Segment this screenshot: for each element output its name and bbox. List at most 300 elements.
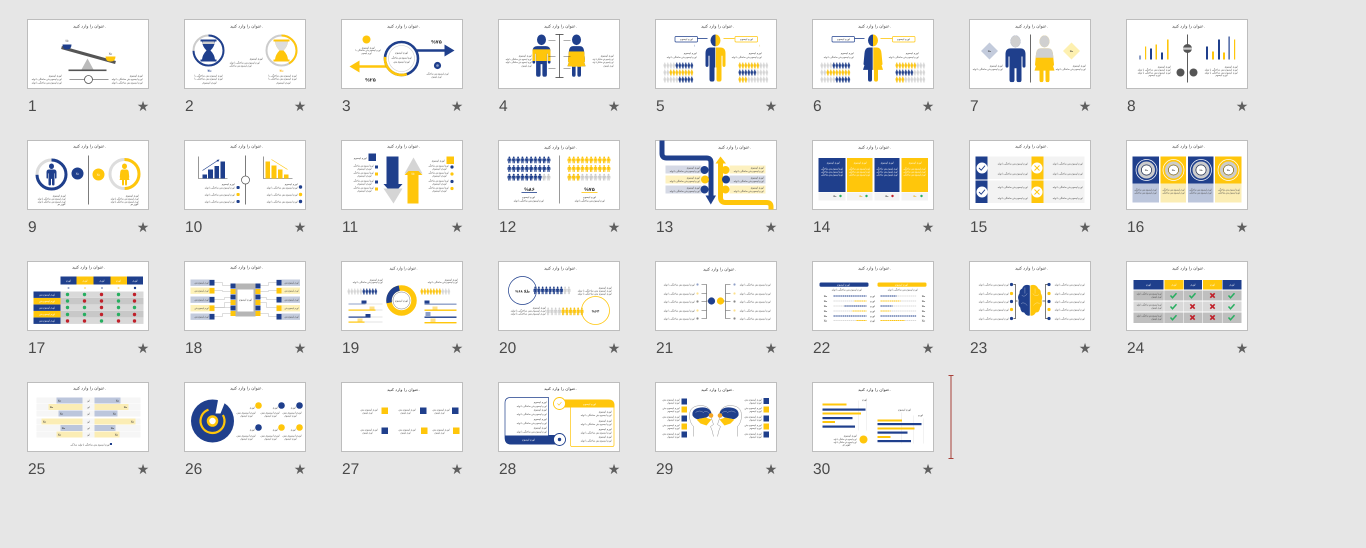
center line and markers [1176,34,1198,82]
text blocks: لورم ایپسوم [400,412,411,414]
slide tile 26: target donut: ★ [294,461,306,477]
table header: لورم [66,280,71,282]
left rows [664,282,699,320]
right list: لورم ایپسوم متن ساختگی [428,164,449,168]
right chart gridlines [902,412,924,444]
table rows [1134,290,1242,323]
icons top row: لورم ایپسوم [284,414,297,418]
target graphic [191,398,234,442]
row labels: لورم ایپسوم متن [39,300,55,303]
sub headings: لورم ایپسوم متن ساختگی با تولید [832,288,862,292]
slide tile 6: split woman with pictograms [812,20,934,115]
left squares and text: لورم ایپسوم [668,427,680,430]
row labels [34,292,60,324]
blue arrow [414,44,454,56]
right head [718,406,742,436]
man figure [532,34,550,77]
text blocks: لورم ایپسوم متن [432,408,450,412]
blue panel: لورم ایپسوم [534,418,547,421]
blue icon and text [426,62,449,78]
table header: لورم [133,280,138,282]
left rows: لورم ایپسوم متن ساختگی با تولید [978,316,1009,320]
blue panel: لورم ایپسوم [534,426,547,430]
left text [506,54,532,68]
right rows: لورم ایپسوم متن ساختگی با تولید [740,292,771,296]
slide tile 23: brain: عنوان را وارد کنید. [1015,266,1048,270]
right pictogram grid [568,156,610,181]
right value and text: لورم ایپسوم متن ساختگی با [268,76,297,80]
slide tile 1: seesaw: طلا [109,52,112,56]
left icon: لورم ایپسوم [354,157,367,160]
right text [1204,66,1238,77]
icons bottom row: لورم ایپسوم [240,438,253,440]
right labels: لورم ایپسوم متن [284,282,299,284]
slide tile 8: bars with center line: 8 [1127,98,1136,115]
left list: لورم ایپسوم متن ساختگی با تولید [204,192,235,196]
slide tile 12: people pictogram percentages: ★ [608,219,620,235]
central chip: لورم ایپسوم [239,298,252,302]
chip pins [230,284,260,316]
left chart gridlines [858,400,866,430]
slide tile 26: target donut: 26 [185,461,202,478]
gauge card 1: لورم ایپسوم متن ساختگی [1134,190,1157,194]
slide tile 20: rings with pictogram rows: ★ [608,340,620,356]
sub headings [832,288,918,292]
right text: لورم ایپسوم متن ساختگی با تولید [110,200,139,204]
center text: لورم ایپسوم [250,58,263,60]
slide tile 7: man, woman, diamonds: 7 [970,98,979,115]
slide tile 28: two framed panels: 28 [499,461,516,478]
right list: لورم ایپسوم [432,190,447,192]
right squares and text: لورم ایپسوم متن [744,432,762,436]
icons top row: لورم ایپسوم متن [260,412,280,414]
left pill: لورم ایپسوم [680,38,693,41]
column yellow 2: لورم ایپسوم متن ساختگی [849,170,870,174]
slide tile 16: four gauge cards: 16 [1127,219,1144,236]
left text: لورم ایپسوم [49,74,62,78]
man figure [1006,36,1026,82]
right pill: لورم ایپسوم [740,38,753,41]
icons bottom row: لورم ایپسوم [284,438,297,440]
right chart labels: لورم ایپسوم [898,408,911,412]
left text: لورم ایپسوم متن ساختگی با تولید [506,57,532,61]
right text: لورم [130,203,139,206]
slide tile 1: seesaw [28,20,149,115]
row labels: طلا [922,310,925,313]
right icon: لورم ایپسوم [432,160,445,162]
row text [1136,292,1162,320]
right text: لورم ایپسوم متن ساختگی با تولید [578,292,612,296]
right rows: لورم ایپسوم متن ساختگی با تولید [1054,300,1085,304]
yellow icon and text: لورم ایپسوم متن ساختگی با [355,48,381,52]
left text: لورم ایپسوم متن ساختگی با تولید [666,55,697,59]
right rows: لورم ایپسوم متن ساختگی با تولید [740,282,771,286]
blue icon and text: لورم ایپسوم متن ساختگی [426,72,449,76]
row stripes [60,292,144,324]
right bars: طلا [113,412,116,416]
slide tile 24: check table [1126,262,1248,357]
slide tile 6: split woman with pictograms: 6 [813,98,822,115]
rising chart [198,156,228,178]
right text: لورم ایپسوم [130,74,143,78]
column blue 1: لورم ایپسوم متن ساختگی [821,166,843,170]
left header text: لورم ایپسوم [370,278,383,282]
column blue 1: طلا [833,195,837,198]
slide tile 4: man and woman with scale: ★ [608,98,620,114]
left text: لورم ایپسوم متن ساختگی با تولید [32,77,62,81]
right text: لورم ایپسوم [604,64,614,68]
slide tile 20: rings with pictogram rows: 20 [499,340,517,357]
donut: لورم ایپسوم [395,300,408,302]
right text: لورم ایپسوم [749,52,762,55]
left bars: طلا [62,427,65,430]
slide tile 25: butterfly bars: عنوان را وارد کنید. [73,386,106,390]
yellow up arrow: طلا [411,172,415,176]
yellow pipe arrow [716,156,771,210]
slide tile 26: target donut: عنوان را وارد کنید. [230,386,263,390]
left value and text: طلا [207,70,212,72]
left rows [978,282,1013,320]
slide tile 29: two heads with brains: 29 [656,461,673,478]
row text: لورم ایپسوم [1152,306,1162,310]
blue ring: %۶۸ طلا [515,290,530,294]
slide tile 16: four gauge cards: ★ [1236,219,1248,235]
row labels: طلا [922,305,925,308]
right bars: طلا [124,406,127,409]
left text: لورم ایپسوم [1158,66,1171,68]
row labels: طلا [922,315,925,318]
left list: لورم ایپسوم متن ساختگی با تولید [204,200,235,204]
column yellow 4: لورم ایپسوم متن ساختگی [904,166,926,170]
falling chart [264,156,292,178]
left text: لورم ایپسوم [522,64,532,68]
left bands: لورم ایپسوم متن ساختگی با تولید [670,169,700,173]
left text [972,64,1003,71]
left text: لورم ایپسوم متن ساختگی با تولید [510,312,546,316]
row labels: لورم [870,305,875,308]
status dots [66,293,136,323]
icons top row: لورم ایپسوم متن [282,412,302,414]
left bands: لورم ایپسوم متن ساختگی با تولید [670,179,700,183]
left pictograms [664,62,693,82]
blue panel: لورم ایپسوم متن ساختگی با تولید [516,404,547,408]
left labels: لورم ایپسوم متن [194,290,209,292]
left chart bars [822,404,866,428]
insertion cursor [948,376,954,458]
right squares and text: لورم ایپسوم متن [744,416,762,418]
blue icon and text: لورم ایپسوم [432,76,442,78]
right bar rows [880,296,916,320]
left rows: لورم ایپسوم متن ساختگی با تولید [978,308,1009,312]
left text [510,306,546,316]
gauge card 3: لورم ایپسوم متن ساختگی [1190,190,1212,194]
footer text: لورم ایپسوم متن ساختگی با تولید سادگی [70,442,110,446]
slide tile 5: split man with pictograms: 5 [656,98,665,115]
right bands: لورم ایپسوم متن ساختگی با تولید [734,189,764,193]
left rows: لورم ایپسوم متن ساختگی با تولید [664,316,695,320]
icons top row: لورم [250,406,255,410]
blue pictograms [534,286,570,294]
brain veins [1021,288,1040,306]
left labels: لورم ایپسوم متن [194,282,209,284]
row labels: لورم [870,315,875,318]
left pill: لورم ایپسوم [837,38,850,41]
right list: لورم ایپسوم [432,168,447,170]
right person [120,164,130,186]
left text: لورم ایپسوم متن ساختگی با تولید [824,55,854,59]
brain left hemisphere [1018,285,1030,316]
left bars [1140,40,1169,60]
right rows: لورم ایپسوم متن ساختگی با تولید [1054,308,1085,312]
left text [514,196,544,202]
left header text [352,278,383,284]
slide tile 18: chip diagram [184,262,306,357]
row text: لورم ایپسوم [1152,318,1162,320]
left text: لورم ایپسوم [990,64,1003,68]
yellow pill: لورم ایپسوم [895,284,908,286]
slide tile 20: rings with pictogram rows: عنوان را وارد کنید. [544,266,577,270]
blue pipe arrow [662,140,716,204]
slide tile 19: donut with bars: ★ [451,340,463,356]
right bands: لورم ایپسوم متن ساختگی با تولید [734,179,764,183]
center labels: لو [86,406,90,409]
right bands: لورم ایپسوم [751,176,764,180]
column blue 3: طلا [885,195,889,198]
left bar rows [834,296,866,320]
yellow panel: لورم ایپسوم [583,403,596,406]
table header: لورم [1230,284,1235,286]
row labels: طلا [824,315,827,318]
left header text: لورم ایپسوم متن ساختگی با تولید [352,280,383,284]
column yellow 4 [902,158,928,200]
text block: لورم ایپسوم متن ساختگی با تولید [834,440,857,444]
left pictograms [348,288,377,294]
left list: لورم ایپسوم متن ساختگی [354,164,374,168]
right bars: طلا [116,400,119,402]
right text: لورم ایپسوم [1216,74,1228,77]
slide tile 11: up and down arrows [342,140,463,236]
slide tile 5: split man with pictograms: ★ [765,98,777,114]
slide tile 7: man, woman, diamonds [970,20,1091,115]
slide tile 1: seesaw: طلا [65,40,69,42]
slide tile 8: bars with center line: ★ [1236,98,1248,114]
right text: لورم ایپسوم [1225,66,1238,68]
slide tile 17: dot matrix table [28,262,149,357]
right text rows: لورم ایپسوم متن ساختگی با تولید [1052,185,1083,189]
column yellow 4: طلا [913,195,917,198]
left bars: طلا [60,412,63,416]
slide tile 5: split man with pictograms: عنوان را وارد کنید. [701,24,734,28]
slide tile 22: dashed timeline table: ★ [922,340,934,356]
right labels: لورم ایپسوم متن [284,316,299,318]
gauge card 2: طلا [1172,169,1175,172]
slide tile 27: six icon items: ★ [451,461,463,477]
slide tile 15: check and cross columns: 15 [970,219,987,236]
slide tile 25: butterfly bars: 25 [28,461,45,478]
right list: لورم ایپسوم متن ساختگی [428,178,449,182]
split woman [863,34,883,82]
left text: لورم ایپسوم [533,306,546,310]
slide tile 29: two heads with brains: ★ [765,461,777,477]
slide tile 17: dot matrix table: ★ [137,340,149,356]
right text: لورم ایپسوم متن ساختگی با تولید [112,80,143,84]
row labels: طلا [922,295,925,298]
slide tile 4: man and woman with scale: عنوان را وارد کنید. [544,24,577,28]
left rows: لورم ایپسوم متن ساختگی با تولید [978,292,1009,296]
slide tile 24: check table: 24 [1127,340,1145,357]
icon squares [382,408,460,434]
left text: لورم ایپسوم متن ساختگی با تولید [514,198,544,202]
left squares and text: لورم ایپسوم [668,418,680,422]
right bars: طلا [111,427,114,430]
right rows: لورم ایپسوم متن ساختگی با تولید [1054,282,1085,286]
icons top row [236,402,303,418]
right bands: لورم ایپسوم [751,166,764,170]
column blue 1: لورم ایپسوم [827,162,840,164]
right text: لورم ایپسوم [906,52,919,55]
left bars: طلا [58,400,61,402]
height bracket [548,34,570,78]
table header: لورم [1191,284,1196,286]
center ring: لورم ایپسوم متن [394,60,410,64]
right bracket [724,284,730,318]
split man [706,34,726,82]
slide tile 2: hourglasses: عنوان را وارد کنید. [230,24,263,28]
right bands: لورم ایپسوم [751,186,764,190]
left pill [675,36,708,48]
right squares and text: لورم ایپسوم متن [744,398,762,402]
slide tile 8: bars with center line: عنوان را وارد کنید. [1172,24,1205,28]
center text: لورم ایپسوم متن ساختگی با تولید [230,60,260,64]
text blocks: لورم ایپسوم [362,412,373,414]
right value and text: لورم ایپسوم [276,82,291,84]
right text rows: لورم ایپسوم متن ساختگی با تولید [1052,162,1083,166]
center text [230,58,263,68]
center labels: لو [86,434,90,436]
left squares and text: لورم ایپسوم [668,402,680,404]
right text [732,52,762,59]
left list [204,183,240,204]
slide tile 11: up and down arrows: عنوان را وارد کنید. [387,144,420,148]
row labels: لورم ایپسوم متن [39,313,55,316]
left text [1138,66,1171,77]
left text rows: لورم ایپسوم متن ساختگی با تولید [998,185,1028,189]
text block: لورم [842,444,851,446]
slide tile 6: split woman with pictograms: عنوان را وارد کنید. [858,24,891,28]
row labels: لورم [870,320,875,322]
slide tile 30: horizontal bar charts: عنوان را وارد کنید. [858,387,891,392]
yellow panel: لورم ایپسوم [599,420,612,422]
right text: لورم ایپسوم [583,196,596,199]
table header: لورم [1172,284,1177,286]
right text: لورم ایپسوم متن ساختگی با تولید [732,55,762,59]
text blocks: لورم ایپسوم متن [360,408,378,412]
left text: لورم ایپسوم متن ساختگی با تولید [1138,68,1171,72]
gauge card 4: لورم ایپسوم متن ساختگی [1218,190,1240,194]
left pill: ٪ [694,44,696,48]
gauge card 4: لورم ایپسوم متن ساختگی [1218,188,1240,192]
gauge card 4 [1215,156,1242,202]
right text: لورم ایپسوم متن ساختگی با تولید [1204,70,1238,74]
right text: لورم ایپسوم متن ساختگی با تولید [112,77,143,81]
slide tile 14: four columns: ★ [922,219,934,235]
text blocks: لورم ایپسوم متن [432,428,450,432]
icons top row: لورم ایپسوم [264,414,277,418]
right text: لورم ایپسوم متن ساختگی با تولید [592,60,614,64]
right rows [733,282,771,320]
gauge card 1 [1132,156,1159,202]
blue badge: طلا [76,172,79,176]
left labels: لورم ایپسوم متن [194,307,209,310]
center ring: لورم ایپسوم متن ساختگی [392,56,412,60]
right chart labels: لورم [918,414,923,417]
right squares and text: لورم ایپسوم [750,410,762,413]
slide tile 17: dot matrix table: 17 [28,340,45,357]
left pictograms [820,62,850,82]
slide tile 21: center tree: 21 [656,340,673,357]
slide tile 6: split woman with pictograms: ★ [922,98,934,114]
left squares and text [662,398,687,438]
right rows: لورم ایپسوم متن ساختگی با تولید [740,316,771,320]
slide tile 21: center tree: ★ [765,340,777,356]
slide tile 14: four columns [812,140,934,236]
yellow panel: لورم ایپسوم متن ساختگی با تولید [580,413,612,417]
center ring [385,42,418,75]
slide tile 20: rings with pictogram rows [498,262,620,357]
right pill [724,36,761,48]
left list: لورم ایپسوم [222,183,235,186]
slide tile 18: chip diagram: 18 [185,340,202,357]
slide tile 14: four columns: 14 [813,219,831,236]
slide tile 25: butterfly bars [28,382,149,478]
text blocks [360,408,450,434]
right squares and text: لورم ایپسوم [750,436,762,438]
left text: لورم ایپسوم [53,194,66,198]
right text: لورم ایپسوم متن ساختگی با تولید [1056,67,1086,71]
yellow icon [860,436,868,444]
right list: لورم ایپسوم متن ساختگی با تولید [266,192,298,196]
right pill: لورم ایپسوم [897,38,910,41]
left list: لورم ایپسوم [358,182,372,186]
row labels: لورم [870,295,875,298]
column blue 3: لورم ایپسوم متن ساختگی [876,172,898,176]
yellow arrow [350,60,390,72]
slide tile 7: man, woman, diamonds: ★ [1079,98,1091,114]
right text [574,196,605,202]
slider arrow [70,78,108,80]
yellow panel: لورم ایپسوم متن ساختگی با تولید [580,430,612,434]
woman figure [568,34,586,77]
left text: لورم ایپسوم [1148,74,1161,77]
right pictograms [896,62,925,82]
gray triangles [384,158,422,204]
slide tile 23: brain [970,262,1091,357]
right text [888,52,919,59]
left list: لورم ایپسوم متن ساختگی [354,170,374,174]
divider [1030,34,1032,82]
right header text: لورم ایپسوم متن ساختگی با تولید [428,280,458,284]
slide tile 29: two heads with brains [656,382,777,478]
column yellow 4: لورم ایپسوم متن ساختگی [904,170,926,174]
gauge card 1: لورم ایپسوم متن ساختگی [1134,188,1157,192]
yellow badge: طلا [97,174,100,176]
column yellow 2: لورم ایپسوم متن ساختگی [849,172,870,176]
left ring [37,160,66,189]
text blocks: لورم ایپسوم [434,412,445,414]
right list: لورم ایپسوم [285,183,298,186]
slide tile 29: two heads with brains: عنوان را وارد کنید. [701,387,734,392]
left squares and text: لورم ایپسوم [668,410,680,413]
